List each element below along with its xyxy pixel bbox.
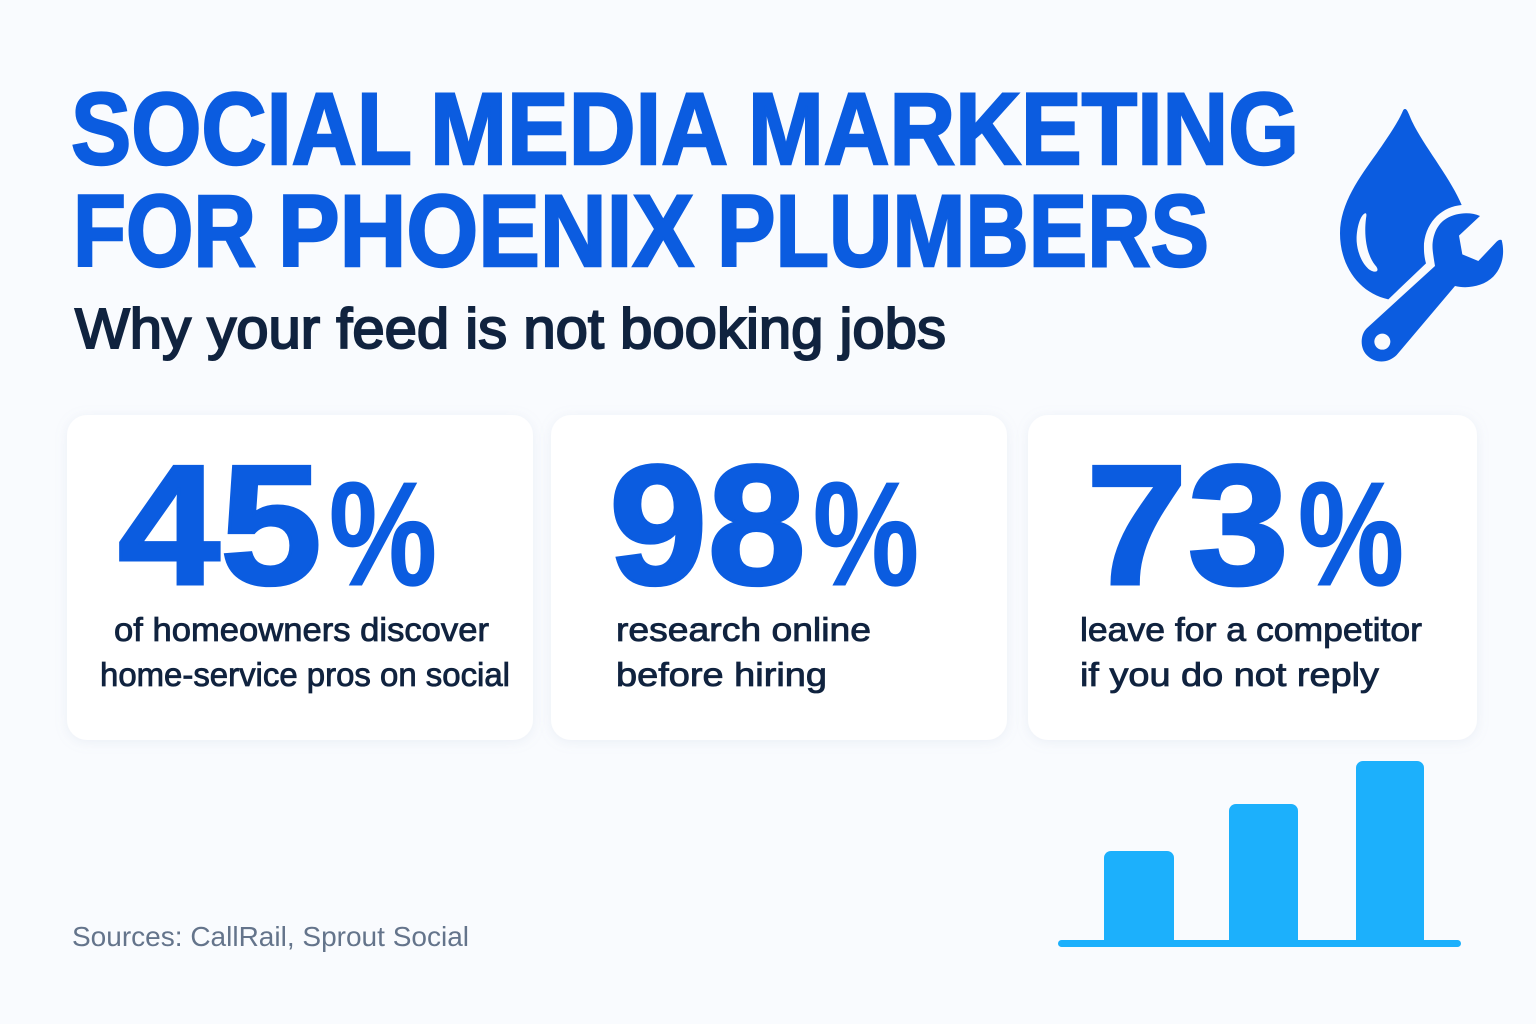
stat description <box>616 612 871 694</box>
subtitle: Why your feed is not booking jobs <box>75 297 946 361</box>
title <box>71 72 1299 288</box>
stat number: 73% <box>1086 430 1404 621</box>
stat description: if you do not reply <box>1080 657 1379 694</box>
stat number: 45%: 45 <box>118 430 322 621</box>
stat description: research online <box>616 612 871 649</box>
stat description: before hiring <box>616 657 827 694</box>
stat number: 45% <box>118 430 437 621</box>
stat number: 73%: 73 <box>1086 430 1289 621</box>
title: FOR <box>73 174 256 288</box>
panel: 73 percent stat <box>1028 415 1477 740</box>
bar chart <box>1058 761 1461 947</box>
stat description <box>1080 612 1422 694</box>
panel: 98 percent stat <box>551 415 1007 740</box>
stat description: home-service pros on social <box>100 657 510 694</box>
stat number: 73%: % <box>1298 452 1404 617</box>
panel: 45 percent stat <box>67 415 533 740</box>
icon: water drop and wrench <box>1340 109 1503 361</box>
sources note: Sources: CallRail, Sprout Social <box>72 921 469 952</box>
stat description: leave for a competitor <box>1080 612 1422 649</box>
stat number: 98%: 98 <box>609 430 806 621</box>
title: MARKETING <box>748 72 1299 186</box>
stat number: 98% <box>609 430 919 621</box>
stat number: 98%: % <box>813 452 919 617</box>
title: PHOENIX <box>278 174 694 288</box>
title: SOCIAL <box>71 72 412 186</box>
title: MEDIA <box>430 72 728 186</box>
stat description: of homeowners discover <box>114 612 489 649</box>
title: PLUMBERS <box>717 174 1209 288</box>
stat description <box>100 612 510 694</box>
stat number: 45%: % <box>329 452 437 617</box>
